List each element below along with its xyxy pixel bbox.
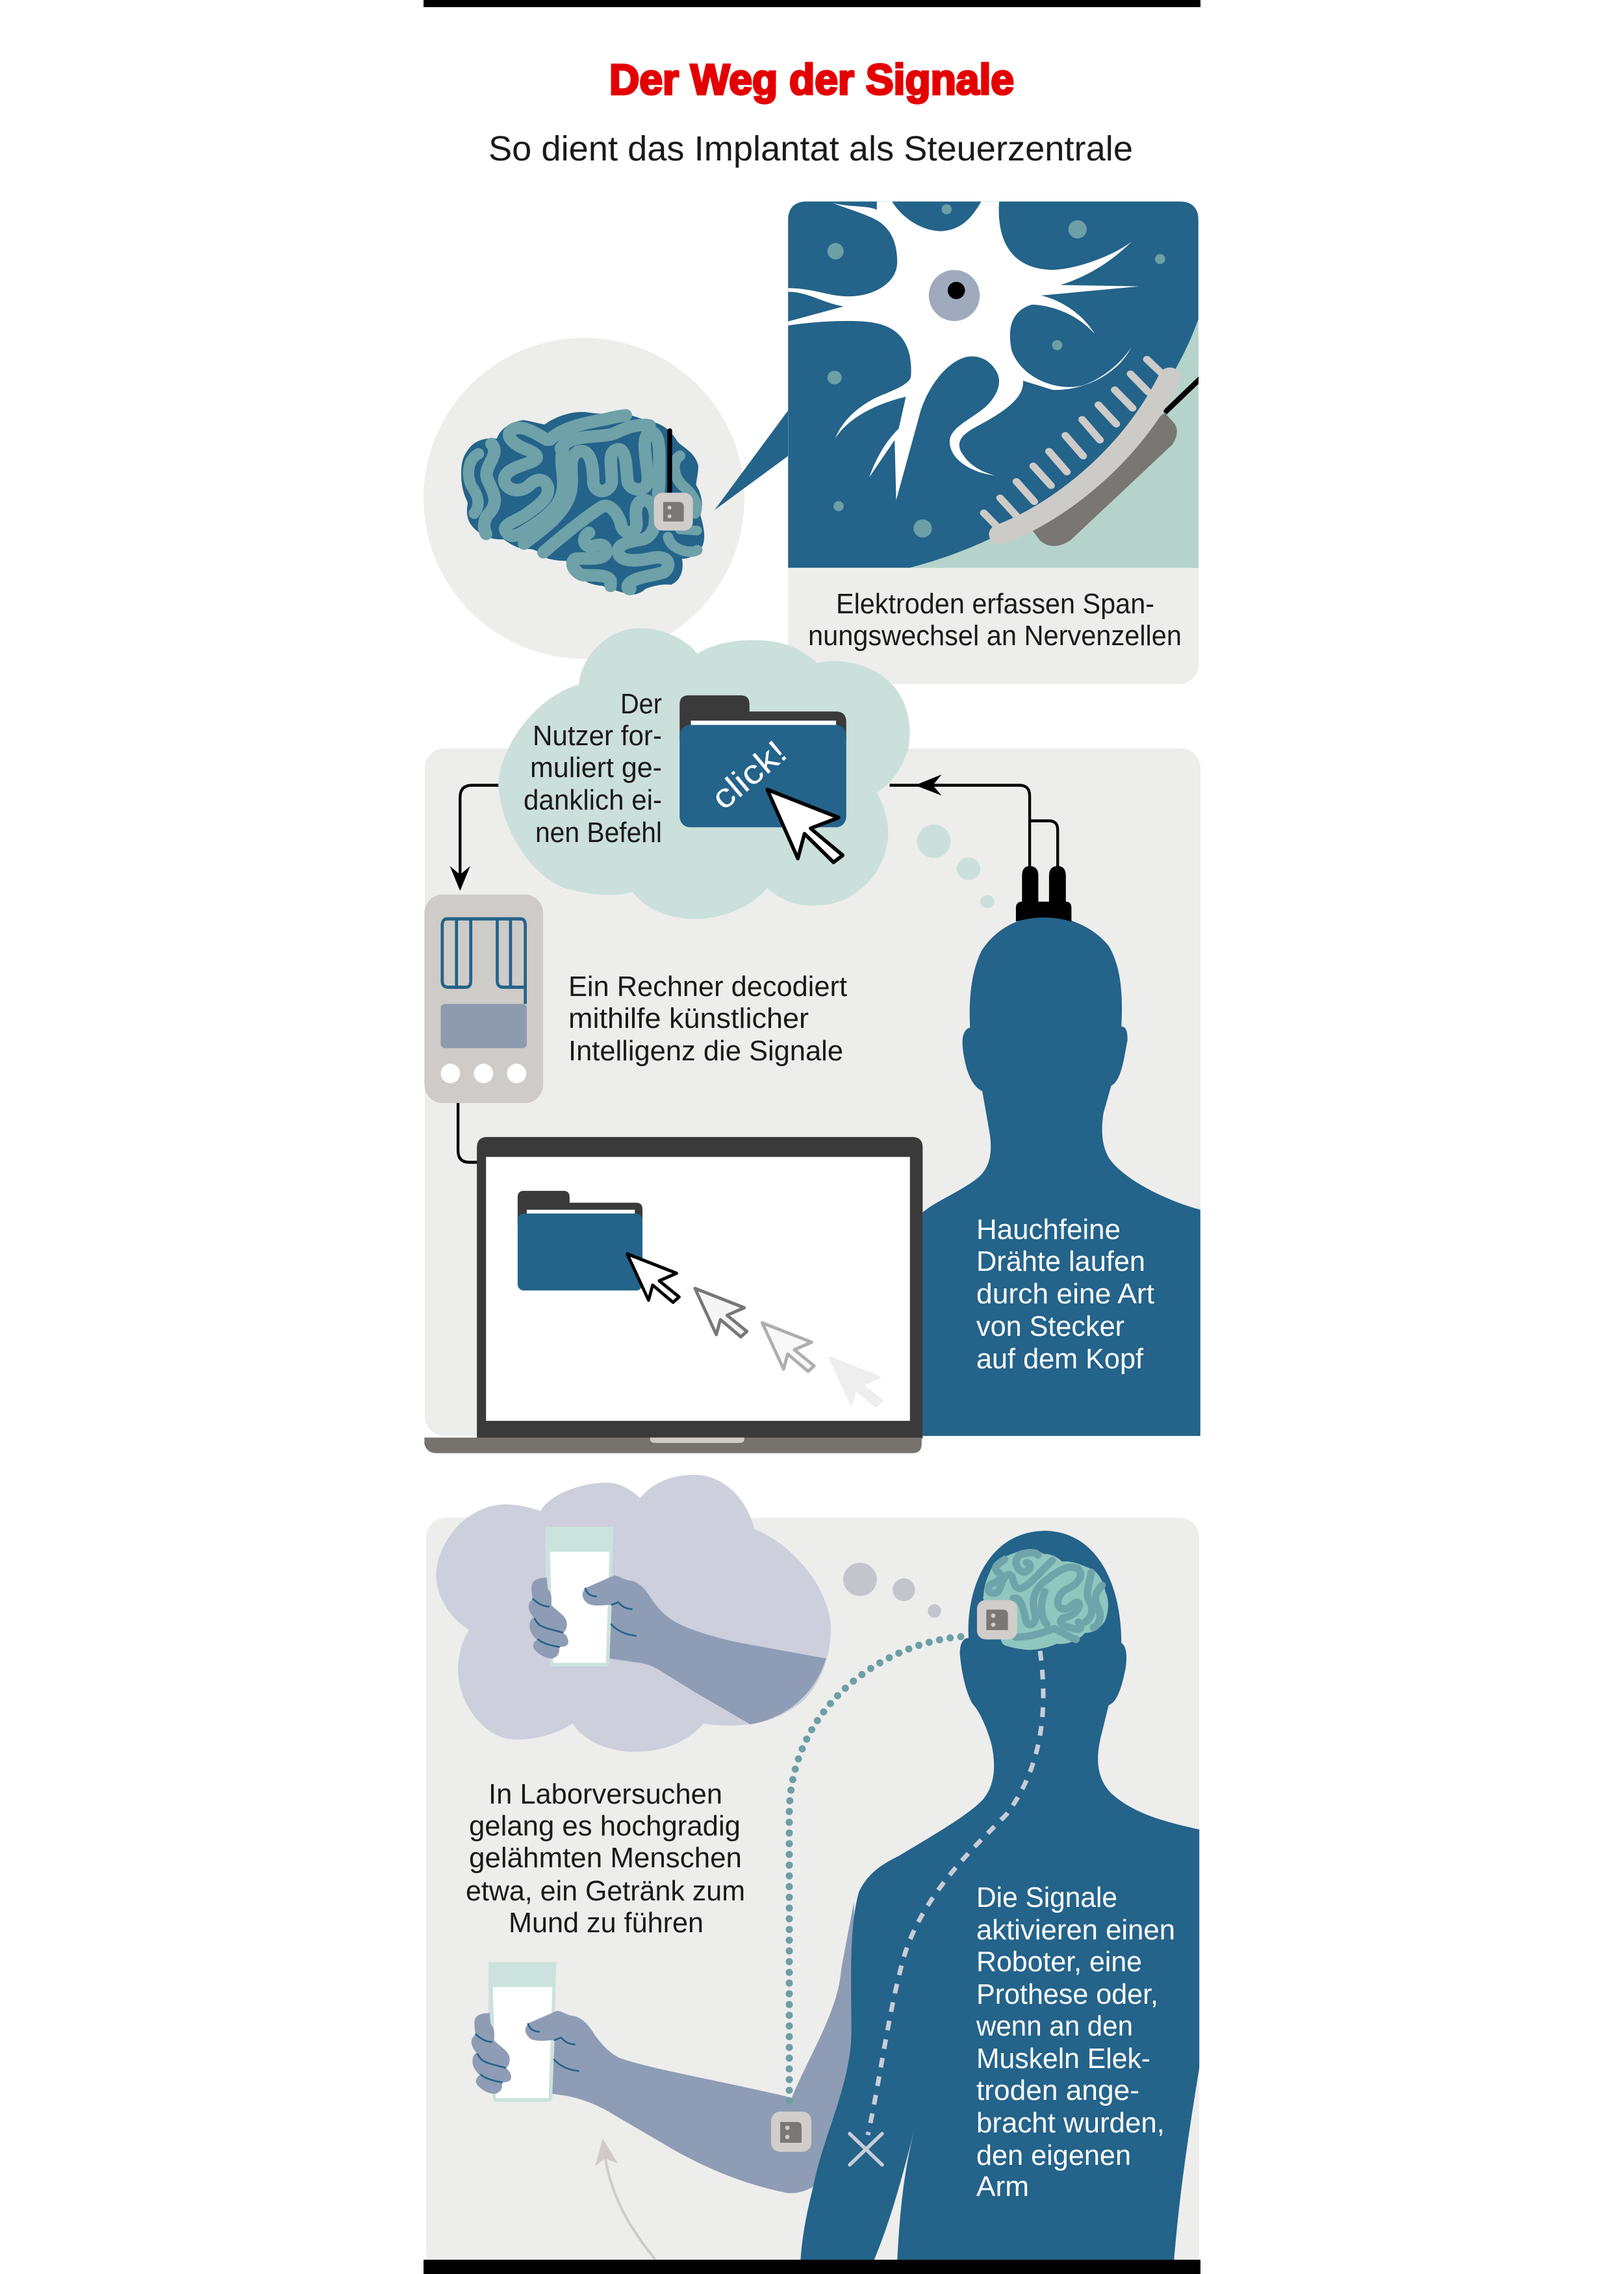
thumb and palm [526, 2011, 620, 2114]
text: wires: durch eine Art [976, 1278, 1154, 1310]
text: lab trials: gelang es hochgradig [469, 1810, 741, 1842]
text: signals: troden ange- [976, 2075, 1139, 2106]
text: decoding: mithilfe künstlicher [568, 1003, 809, 1034]
text: decoding [568, 971, 847, 1067]
caption: electrodes [808, 588, 1182, 652]
neuron cell [788, 201, 1139, 500]
device: computer unit [424, 895, 543, 1162]
text: user command: muliert ge- [530, 752, 662, 784]
upper arm [553, 1902, 859, 2193]
display [440, 1004, 527, 1048]
panel: brain circle [424, 338, 744, 659]
cursor [767, 789, 843, 862]
electrode comb [983, 359, 1170, 535]
thought bubbles [843, 1563, 941, 1618]
hand creases [533, 1589, 636, 1647]
text: signals: bracht wurden, [976, 2107, 1165, 2139]
panel: neuron close-up [788, 201, 1200, 568]
text: lab trials: etwa, ein Getränk zum [466, 1875, 745, 1907]
text: lab trials [466, 1778, 745, 1939]
hand with glass [472, 1962, 620, 2114]
electrode base [1030, 413, 1177, 546]
subtitle: So dient das Implantat als Steuerzentrale [488, 129, 1133, 168]
arrow: arm movement [595, 2139, 655, 2259]
folder front [679, 725, 846, 827]
text: wires: Drähte laufen [976, 1246, 1145, 1277]
arm implant [771, 2112, 811, 2152]
person body [800, 1531, 1199, 2262]
brain in head with implant [977, 1550, 1108, 1650]
implant [977, 1600, 1017, 1639]
text: signals: Roboter, eine [976, 1946, 1142, 1978]
brain silhouette [983, 1550, 1108, 1650]
text: signals: wenn an den [976, 2010, 1133, 2042]
text: lab trials: gelähmten Menschen [469, 1842, 742, 1874]
folder [518, 1191, 642, 1226]
icon: folder with click [679, 695, 846, 862]
text: user command: Der [620, 688, 662, 720]
panel: decoding section background [425, 748, 1200, 1436]
thought cloud with imagined arm [436, 1475, 831, 1752]
caption: electrodes: nungswechsel an Nervenzellen [808, 620, 1182, 652]
blocked signal cross [850, 2134, 882, 2165]
panel: caption card behind neuron [788, 201, 1199, 684]
folder back [679, 695, 846, 741]
bottom black bar [424, 2260, 1200, 2274]
text: user command: nen Befehl [535, 817, 662, 849]
text: user command: Nutzer for- [533, 720, 662, 752]
panel: third section background [426, 1518, 1199, 2271]
frame [477, 1137, 922, 1438]
text: signals: Muskeln Elek- [976, 2043, 1150, 2075]
text: decoding: Ein Rechner decodiert [568, 971, 847, 1003]
text: user command [524, 688, 662, 849]
text: wires: auf dem Kopf [976, 1343, 1144, 1375]
thought cloud [498, 628, 910, 919]
text: signals: Prothese oder, [976, 1978, 1158, 2010]
text: lab trials: In Laborversuchen [488, 1778, 722, 1810]
glass [546, 1527, 613, 1667]
housing [424, 895, 543, 1103]
nucleus [929, 270, 980, 321]
text: signals [976, 1882, 1175, 2203]
blue tissue [788, 201, 1199, 568]
plug [1016, 866, 1071, 921]
spinal signal dashed [868, 1651, 1043, 2135]
buttons [440, 1064, 460, 1083]
glass [488, 1962, 556, 2102]
text: decoding: Intelligenz die Signale [568, 1035, 843, 1067]
text: lab trials: Mund zu führen [509, 1907, 704, 1939]
cable [458, 1102, 479, 1162]
brain folds [468, 415, 697, 589]
electrode wire [1165, 378, 1200, 413]
text: wires [976, 1214, 1154, 1375]
click label: click! [704, 734, 794, 817]
wire to cloud [889, 786, 1058, 871]
text: signals: Die Signale [976, 1882, 1117, 1913]
laptop [424, 1137, 922, 1453]
text: wires: von Stecker [976, 1310, 1124, 1342]
text: signals: den eigenen [976, 2140, 1131, 2171]
thought bubbles [917, 824, 995, 908]
text: signals: Arm [976, 2171, 1029, 2203]
callout pointer [715, 411, 788, 510]
wire [667, 428, 672, 496]
arrow: cloud to computer [450, 786, 500, 891]
top black bar [424, 0, 1200, 7]
hand creases [476, 2024, 579, 2082]
cursor trail [830, 1358, 882, 1406]
text: wires: Hauchfeine [976, 1214, 1121, 1246]
base [424, 1438, 922, 1453]
screen [486, 1157, 910, 1421]
circuit [442, 919, 526, 1004]
text: signals: aktivieren einen [976, 1914, 1175, 1946]
silhouette [922, 916, 1200, 1436]
arrow: wire into cloud [915, 774, 941, 795]
tissue dots [828, 204, 1165, 537]
icon: brain with implant [461, 412, 704, 594]
title: Der Weg der Signale [609, 55, 1014, 103]
implant [654, 492, 693, 531]
forearm and thumb [583, 1576, 826, 1724]
signal path dotted [789, 1637, 961, 2104]
fingers [472, 2013, 511, 2094]
brain folds [989, 1553, 1102, 1639]
fingers [529, 1578, 568, 1659]
brain silhouette [461, 412, 704, 594]
text: user command: danklich ei- [524, 784, 662, 816]
caption: electrodes: Elektroden erfassen Span- [836, 588, 1154, 620]
person with connector [889, 786, 1200, 1436]
